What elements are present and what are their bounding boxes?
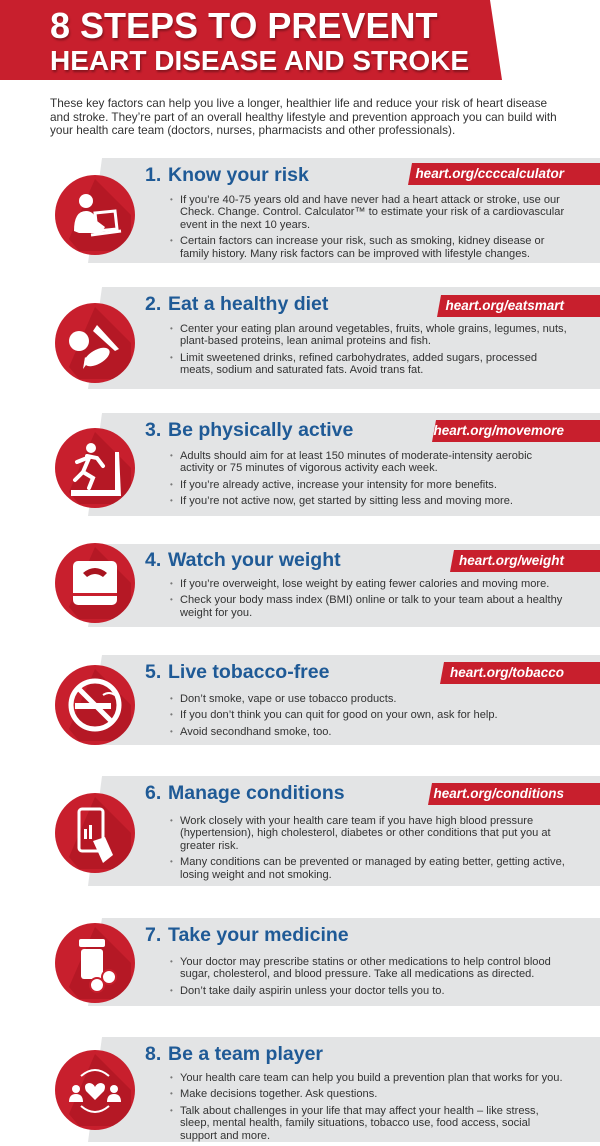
heading 7: Take your medicine <box>168 924 349 946</box>
bullets 5: Don’t smoke, vape or use tobacco products. <box>180 693 396 705</box>
bullets 8: Make decisions together. Ask questions. <box>180 1088 377 1100</box>
bullets 5: If you don’t think you can quit for good on your own, ask for help. <box>180 709 498 721</box>
icon: phone in hand <box>55 793 135 873</box>
heading 1: 1. <box>145 164 161 186</box>
url 6: heart.org/conditions <box>433 786 564 801</box>
bullets 1: Certain factors can increase your risk, such as smoking, kidney disease or family history. Many risk factors can be improved with lifestyle changes. <box>180 235 544 260</box>
bullets 6 <box>170 815 565 881</box>
url 6 <box>428 783 600 805</box>
url 4: heart.org/weight <box>459 553 564 568</box>
url 2 <box>437 295 600 317</box>
url 2: heart.org/eatsmart <box>445 298 564 313</box>
url 4 <box>450 550 600 572</box>
icon: no smoking <box>55 665 135 745</box>
url 1: heart.org/ccccalculator <box>415 166 564 181</box>
heading 5: Live tobacco-free <box>168 661 329 683</box>
heading 5: 5. <box>145 661 161 683</box>
url 3: heart.org/movemore <box>433 423 564 438</box>
heading 6: 6. <box>145 782 161 804</box>
heading 2: Eat a healthy diet <box>168 293 328 315</box>
heading 3: 3. <box>145 419 161 441</box>
heading 8: 8. <box>145 1043 161 1065</box>
bullets 3: If you’re already active, increase your intensity for more benefits. <box>180 479 497 491</box>
icon: treadmill runner <box>55 428 135 508</box>
bullets 3: Adults should aim for at least 150 minutes of moderate-intensity aerobic activity or 75 minutes of vigorous activity each week. <box>180 450 532 474</box>
heading 6: Manage conditions <box>168 782 345 804</box>
bullets 7: Your doctor may prescribe statins or other medications to help control blood sugar, cholesterol, and blood pressure. Take all medications as directed. <box>180 956 551 980</box>
icon: apple carrot fish <box>55 303 135 383</box>
bullets 7 <box>170 956 551 997</box>
bullets 8: Your health care team can help you build a prevention plan that works for you. <box>180 1072 563 1084</box>
bullets 7: Don’t take daily aspirin unless your doctor tells you to. <box>180 985 445 997</box>
heading 7: 7. <box>145 924 161 946</box>
heading 4: Watch your weight <box>168 549 341 571</box>
bullets 6: Many conditions can be prevented or managed by eating better, getting active, losing weight and not smoking. <box>180 856 565 881</box>
intro text: These key factors can help you live a longer, healthier life and reduce your risk of heart disease and stroke. They’re part of an overall healthy lifestyle and prevention approach you can build with your health care team (doctors, nurses, pharmacists and other professionals). <box>50 96 557 137</box>
heading 8: Be a team player <box>168 1043 323 1065</box>
icon: scale <box>55 543 135 623</box>
url 3 <box>432 420 600 442</box>
title banner: HEART DISEASE AND STROKE <box>50 45 469 76</box>
bullets 3 <box>170 450 532 507</box>
panel: 8 team player <box>88 1037 600 1142</box>
bullets 4 <box>170 578 562 619</box>
bullets 5: Avoid secondhand smoke, too. <box>180 726 332 738</box>
icon: pill bottle <box>55 923 135 1003</box>
url 1 <box>408 163 600 185</box>
bullets 2 <box>170 323 567 376</box>
heading 1: Know your risk <box>168 164 309 186</box>
panel: 6 conditions <box>88 776 600 886</box>
panel: 5 tobacco <box>88 655 600 745</box>
panel: 1 know your risk <box>88 158 600 263</box>
panel: 4 weight <box>88 544 600 627</box>
url 5 <box>440 662 600 684</box>
bullets 8: Talk about challenges in your life that may affect your health – like stress, sleep, mental health, family situations, tobacco use, food access, social support and more. <box>180 1105 539 1142</box>
bullets 6: Work closely with your health care team if you have high blood pressure (hypertension), high cholesterol, diabetes or other conditions that put you at greater risk. <box>180 815 551 852</box>
bullets 8 <box>170 1072 563 1142</box>
icon: person with laptop <box>55 175 135 255</box>
bullets 3: If you’re not active now, get started by sitting less and moving more. <box>180 495 513 507</box>
url 5: heart.org/tobacco <box>450 665 564 680</box>
bullets 4: If you’re overweight, lose weight by eating fewer calories and moving more. <box>180 578 549 590</box>
title banner: 8 STEPS TO PREVENT <box>50 5 437 46</box>
bullets 1 <box>170 194 564 260</box>
title banner <box>0 0 502 80</box>
panel: 2 eat healthy <box>88 287 600 389</box>
heading 4: 4. <box>145 549 161 571</box>
heading 2: 2. <box>145 293 161 315</box>
bullets 2: Center your eating plan around vegetables, fruits, whole grains, legumes, nuts, plant-based proteins, lean animal proteins and fish. <box>180 323 567 347</box>
bullets 2: Limit sweetened drinks, refined carbohydrates, added sugars, processed meats, sodium and saturated fats. Avoid trans fat. <box>180 352 537 376</box>
heading 3: Be physically active <box>168 419 353 441</box>
bullets 5 <box>170 693 498 738</box>
panel: 7 medicine <box>88 918 600 1006</box>
bullets 4: Check your body mass index (BMI) online or talk to your team about a healthy weight for you. <box>180 594 562 619</box>
icon: team and heart <box>55 1050 135 1130</box>
panel: 3 physically active <box>88 413 600 516</box>
bullets 1: If you’re 40-75 years old and have never had a heart attack or stroke, use our Check. Change. Control. Calculator™ to estimate your risk of a cardiovascular event in the next 10 years. <box>180 194 564 231</box>
